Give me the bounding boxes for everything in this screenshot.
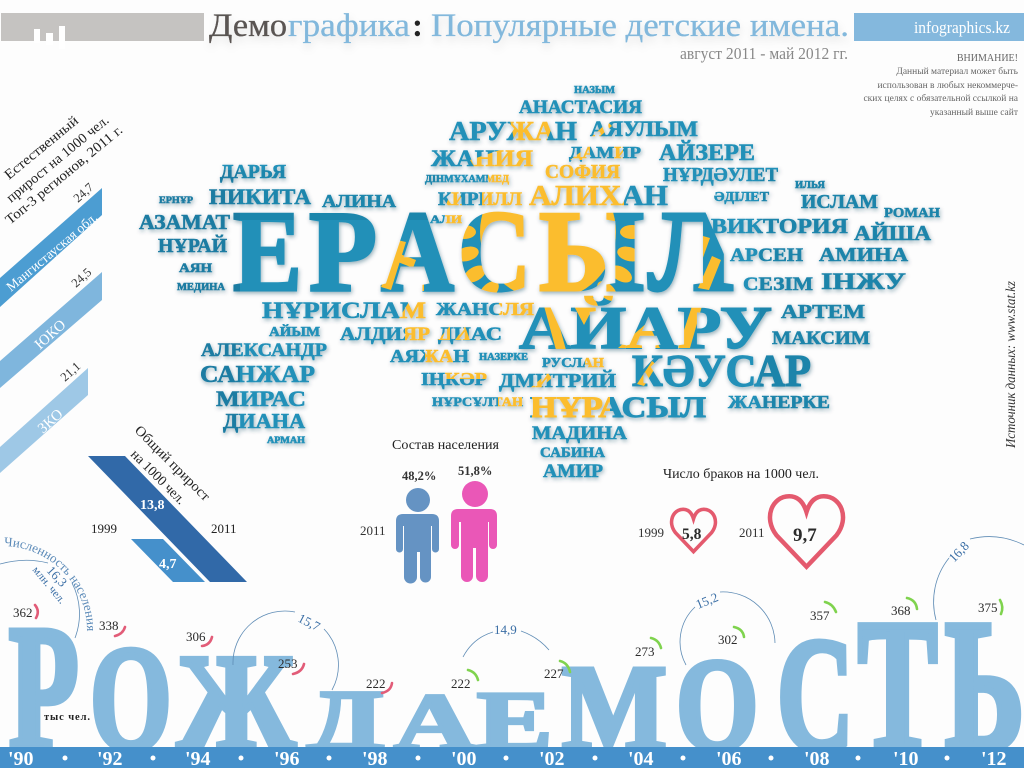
word cloud of popular names: АЛЕКСАНДР: [201, 341, 327, 361]
word cloud of popular names: НҰРАСЫЛ: [530, 391, 706, 424]
population arc 16,3: млн. чел.: [30, 564, 68, 607]
word cloud of popular names: АЛИ: [430, 212, 463, 226]
word cloud of popular names: АМИНА: [819, 245, 908, 266]
word cloud of popular names: АЯЖАН: [390, 346, 469, 366]
marriages per 1000: [638, 466, 843, 567]
heading: natural growth: Топ-3 регионов, 2011 г.: [3, 123, 126, 228]
word cloud of popular names: ДМИТРИЙ: [499, 370, 616, 392]
population arc 15,2: 15,2: [694, 589, 720, 612]
word cloud of popular names: [139, 85, 940, 482]
heading: natural growth: Естественный: [2, 113, 82, 183]
births data points with trend ticks: 302: [718, 632, 738, 647]
title: :: [412, 8, 423, 44]
births data points with trend ticks: 357: [810, 608, 830, 623]
word cloud of popular names: АЙЗЕРЕ: [659, 140, 755, 165]
largest name: Р: [309, 188, 377, 316]
site badge: infographics.kz: [914, 18, 1010, 37]
word cloud of popular names: МИРАС: [216, 386, 306, 411]
word cloud of popular names: АЙША: [854, 221, 932, 245]
births data points with trend ticks: 253: [278, 656, 298, 671]
word cloud of popular names: НҰРАЙ: [158, 235, 227, 257]
word cloud of popular names: ДИАС: [438, 325, 502, 345]
marriages per 1000: Число браков на 1000 чел.: [663, 466, 819, 481]
word cloud of popular names: ӘДІЛЕТ: [714, 190, 770, 205]
notice text: ских целях с обязательной ссылкой на: [863, 93, 1019, 104]
births data points with trend ticks: 362: [13, 605, 32, 620]
births data points with trend ticks: 222: [366, 676, 386, 691]
chart: total growth parallelograms: [88, 456, 247, 582]
word cloud of popular names: АРМАН: [267, 436, 306, 446]
timeline bar: [0, 747, 1024, 768]
word cloud of popular names: ІНЖУ: [821, 269, 906, 294]
bar: Mangystau region: Мангистауская обл.: [3, 210, 100, 294]
word cloud of popular names: ИСЛАМ: [801, 192, 878, 213]
marriages per 1000: 1999: [638, 525, 664, 540]
word cloud of popular names: АРТЕМ: [781, 302, 865, 323]
births data points with trend ticks: 368: [891, 603, 910, 618]
word cloud of popular names: МАКСИМ: [772, 329, 870, 349]
word cloud of popular names: МАДИНА: [532, 424, 628, 444]
chart: total growth parallelograms: 13,8: [140, 498, 164, 513]
word cloud of popular names: ЖАНСЛЯ: [436, 299, 534, 319]
word cloud of popular names: МЕДИНА: [177, 282, 226, 293]
word cloud of popular names: РОМАН: [884, 206, 940, 221]
big word: birth rate: Д: [307, 672, 384, 768]
population arc 16,3: [0, 560, 80, 638]
icon: large heart: [770, 496, 843, 567]
big word: birth rate: Е: [477, 674, 552, 768]
word cloud of popular names: НИКИТА: [209, 184, 311, 209]
word cloud of popular names: КИРИЛЛ: [438, 190, 522, 210]
word cloud of popular names: НҰРДӘУЛЕТ: [663, 165, 778, 186]
largest name: А: [381, 188, 454, 316]
population composition: 2011: [360, 523, 386, 538]
bar: West Kazakhstan: [0, 359, 88, 473]
word cloud of popular names: АЛИХАН: [529, 181, 668, 212]
population composition: 51,8%: [458, 464, 492, 478]
population arc 14,9: 14,9: [494, 622, 517, 637]
icon: small heart: [672, 509, 715, 552]
births data points with trend ticks: 227: [544, 666, 564, 681]
word cloud of popular names: АЙЫМ: [269, 323, 320, 340]
births data points with trend ticks: [13, 598, 1002, 693]
births data points with trend ticks: 338: [99, 618, 118, 633]
word cloud of popular names: АНАСТАСИЯ: [519, 98, 643, 118]
largest name: Е: [233, 188, 302, 316]
word cloud of popular names: ДИАНА: [223, 409, 305, 433]
notice text: [863, 53, 1019, 118]
big word: birth rate: [9, 582, 1024, 768]
title: графика: [288, 8, 410, 44]
word cloud of popular names: ИЛЬЯ: [795, 180, 826, 191]
word cloud of popular names: ЕРНҰР: [159, 196, 193, 206]
word cloud of popular names: АЯУЛЫМ: [590, 116, 698, 141]
heading: total growth: Общий прирост: [131, 423, 212, 505]
word cloud of popular names: ЖАНИЯ: [431, 146, 533, 171]
word cloud of popular names: ВИКТОРИЯ: [711, 214, 849, 238]
header logo bar: [1, 13, 204, 49]
population arc 15,7: 15,7: [296, 610, 323, 634]
bar: Mangystau region: [0, 180, 102, 307]
population arc 15,7: [233, 610, 338, 690]
word cloud of popular names: АМИР: [543, 462, 603, 482]
births data points with trend ticks: 306: [186, 629, 206, 644]
notice text: Данный материал может быть: [896, 66, 1019, 77]
heading: total growth: на 1000 чел.: [127, 447, 188, 508]
word cloud of popular names: ЖАНЕРКЕ: [728, 392, 830, 412]
marriages per 1000: 2011: [739, 525, 765, 540]
data source: Источник данных: www.stat.kz: [1003, 280, 1018, 449]
title: Популярные детские имена.: [431, 8, 849, 44]
word cloud of popular names: НҰРСҰЛТАН: [432, 394, 523, 409]
third largest name: КӘУСАР: [632, 346, 811, 396]
chart: total growth parallelograms: 1999: [91, 521, 117, 536]
bar: South Kazakhstan: 24,5: [69, 265, 94, 290]
word cloud of popular names: АЯН: [179, 260, 212, 275]
population composition: Состав населения: [392, 437, 499, 452]
bar: West Kazakhstan: ЗКО: [35, 406, 67, 437]
births data points with trend ticks: 375: [978, 600, 998, 615]
site badge: [854, 13, 1024, 41]
word cloud of popular names: АЗАМАТ: [139, 210, 231, 234]
icon: man: [396, 488, 439, 583]
curved label: population: Численность населения: [4, 537, 93, 632]
word cloud of popular names: ІҢКӘР: [421, 369, 487, 389]
subtitle: period: август 2011 - май 2012 гг.: [680, 44, 848, 63]
notice text: ВНИМАНИЕ!: [957, 53, 1018, 64]
largest name: Ы: [539, 188, 644, 316]
births data points with trend ticks: 222: [451, 676, 470, 691]
word cloud of popular names: АЛДИЯР: [340, 325, 430, 345]
word cloud of popular names: СОФИЯ: [545, 162, 620, 183]
births data points with trend ticks: 273: [635, 644, 654, 659]
word cloud of popular names: АРУЖАН: [449, 116, 577, 146]
icon: woman: [451, 481, 497, 582]
word cloud of popular names: ДАРЬЯ: [220, 162, 286, 183]
population composition: [360, 437, 499, 583]
title: Демо: [209, 8, 287, 44]
notice text: указанный выше сайт: [930, 107, 1019, 118]
word cloud of popular names: АЛИНА: [322, 191, 396, 211]
word cloud of popular names: НАЗЫМ: [574, 85, 616, 96]
word cloud of popular names: СЕЗІМ: [743, 275, 813, 295]
word cloud of popular names: НҰРИСЛАМ: [262, 298, 426, 323]
second largest name: АЙАРУ: [519, 295, 772, 361]
title: [209, 8, 849, 44]
marriages per 1000: 9,7: [793, 525, 817, 546]
word cloud of popular names: АРСЕН: [730, 246, 804, 266]
largest name: Л: [648, 188, 734, 316]
population composition: 48,2%: [402, 469, 436, 483]
word cloud of popular names: ДАМИР: [569, 143, 641, 162]
population arc 16,8: 16,8: [945, 538, 972, 565]
bar: South Kazakhstan: [0, 265, 102, 388]
population arc 16,3: 16,3: [44, 563, 70, 590]
bar: Mangystau region: 24,7: [71, 180, 96, 205]
word cloud of popular names: РУСЛАН: [542, 356, 604, 371]
largest name: [232, 210, 738, 298]
word cloud of popular names: САБИНА: [540, 445, 605, 461]
word cloud of popular names: ДІНМҰХАММЕД: [425, 174, 509, 185]
big word: birth rate: А: [394, 679, 476, 767]
marriages per 1000: 5,8: [682, 526, 702, 543]
unit label: тыс чел.: [44, 712, 90, 723]
chart: total growth parallelograms: 2011: [211, 521, 237, 536]
notice text: использован в любых некоммерче-: [877, 80, 1018, 91]
chart: total growth parallelograms: 4,7: [159, 557, 176, 572]
population arc 14,9: [463, 622, 549, 657]
word cloud of popular names: САНЖАР: [200, 362, 315, 388]
population arc 16,8: [934, 537, 1024, 620]
bar: West Kazakhstan: 21,1: [58, 359, 83, 384]
population arc 15,2: [680, 589, 775, 665]
word cloud of popular names: НАЗЕРКЕ: [479, 352, 528, 363]
largest name: С: [458, 188, 531, 316]
bar: South Kazakhstan: ЮКО: [32, 317, 69, 353]
heading: natural growth: прирост на 1000 чел.: [4, 113, 112, 206]
